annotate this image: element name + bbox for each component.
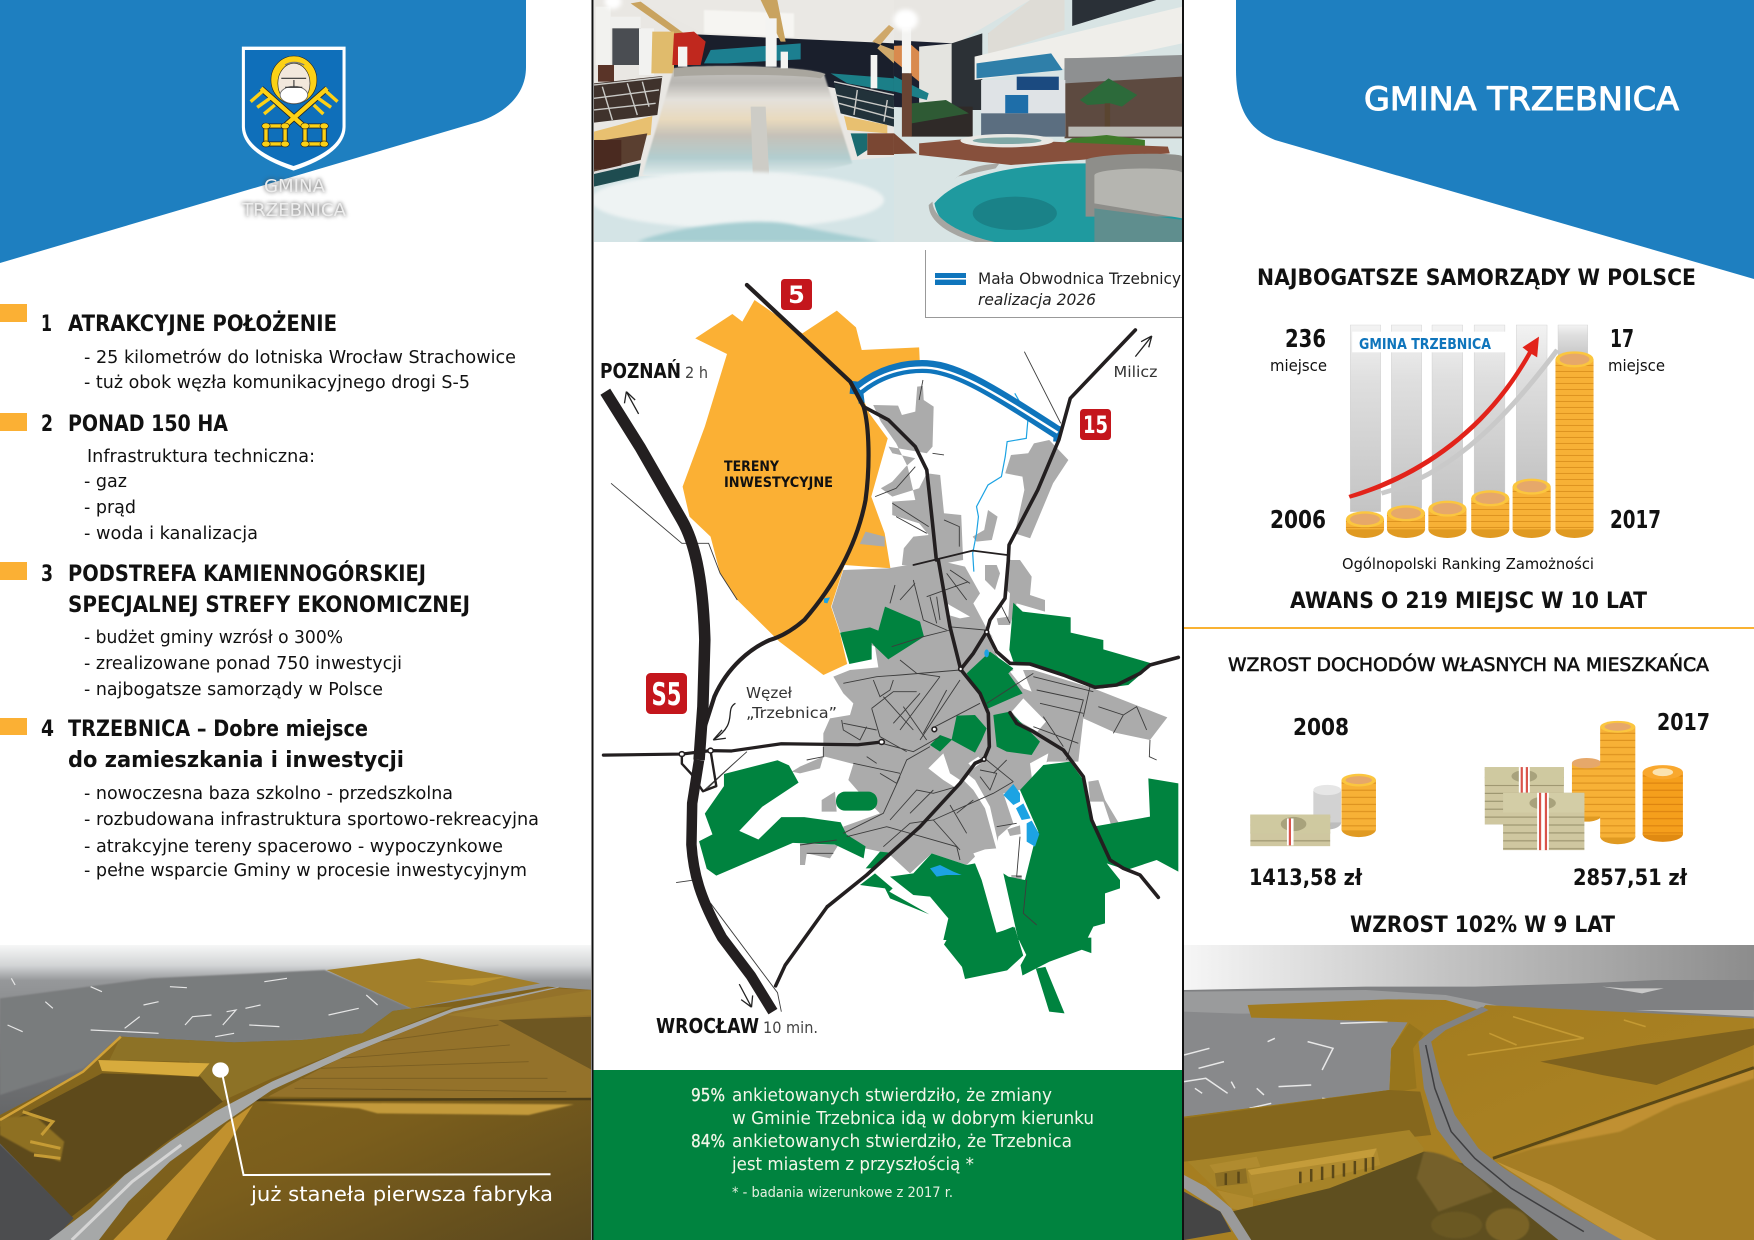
chart: income 2017: 2857,51 zł xyxy=(1573,866,1688,891)
chart: ranking rise: miejsce xyxy=(1608,356,1665,375)
section 2: area xyxy=(0,412,315,544)
panel: survey results: w Gminie Trzebnica idą w dobrym kierunku xyxy=(732,1108,1094,1129)
map labels: Milicz xyxy=(1114,363,1158,381)
heading: income growth: WZROST DOCHODÓW WŁASNYCH NA MIESZKAŃCA xyxy=(1228,652,1709,676)
road badge 5: 5 xyxy=(788,281,805,309)
chart: ranking rise xyxy=(1270,324,1665,573)
icon: Trzebnica coat of arms xyxy=(242,47,346,171)
panel: survey results: 95% xyxy=(691,1085,725,1106)
chart: ranking rise: 236 xyxy=(1285,324,1326,353)
chart: ranking rise: 2017 xyxy=(1610,505,1661,534)
photo: water park fountain xyxy=(590,0,1187,243)
section 4: good place: do zamieszkania i inwestycji xyxy=(68,748,404,773)
map labels: 2 h xyxy=(685,363,708,382)
title: GMINA TRZEBNICA xyxy=(1364,80,1679,118)
chart: income 2008: 1413,58 zł xyxy=(1249,866,1363,891)
photo: aerial view of investment land xyxy=(1184,945,1754,1240)
road badge S5 xyxy=(646,672,688,714)
photo: aerial view with first factory xyxy=(0,945,592,1240)
panel: survey results xyxy=(593,1070,1182,1240)
panel: left blue header xyxy=(0,0,526,263)
section 4: good place: - atrakcyjne tereny spacerowo - wypoczynkowe xyxy=(84,836,503,857)
section 3: economic zone: 3 xyxy=(41,562,53,587)
photo: aerial view with first factory: już staneła pierwsza fabryka xyxy=(250,1182,553,1206)
map labels: WROCŁAW xyxy=(656,1014,759,1038)
divider: right fold line xyxy=(1182,0,1184,1240)
map legend xyxy=(926,250,1182,318)
map: investment area xyxy=(683,300,920,675)
map: streets xyxy=(611,352,1157,1012)
map legend: realizacja 2026 xyxy=(978,290,1096,309)
section 3: economic zone: - zrealizowane ponad 750 inwestycji xyxy=(84,653,402,674)
panel: right blue header xyxy=(1236,0,1754,279)
section 1: location xyxy=(0,304,516,393)
coin stacks xyxy=(1346,351,1594,538)
heading: richest municipalities: NAJBOGATSZE SAMORZĄDY W POLSCE xyxy=(1257,266,1696,291)
map labels xyxy=(600,359,1158,1038)
map legend: Mała Obwodnica Trzebnicy xyxy=(978,269,1181,288)
panel: survey results: 84% xyxy=(691,1131,725,1152)
section 3: economic zone: PODSTREFA KAMIENNOGÓRSKIEJ xyxy=(68,561,426,587)
icon: money 2008 xyxy=(1250,774,1376,846)
section 4: good place: 4 xyxy=(41,717,54,742)
road badge 15 xyxy=(1080,408,1112,440)
section 1: location: - tuż obok węzła komunikacyjnego drogi S-5 xyxy=(84,372,470,393)
chart: ranking rise: 2006 xyxy=(1270,505,1326,534)
section 3: economic zone: - budżet gminy wzrósł o 300% xyxy=(84,627,343,648)
map: direction arrows xyxy=(624,336,1152,1007)
map labels: Węzeł xyxy=(746,684,793,702)
section 2: area: PONAD 150 HA xyxy=(68,412,228,437)
road badge 5 xyxy=(780,278,812,310)
map: north built-up areas xyxy=(873,386,1068,567)
section 4: good place: - rozbudowana infrastruktura sportowo-rekreacyjna xyxy=(84,809,539,830)
section 3: economic zone xyxy=(0,561,470,700)
chart: ranking rise: GMINA TRZEBNICA xyxy=(1359,335,1491,353)
section 2: area: Infrastruktura techniczna: xyxy=(87,446,315,467)
section 2: area: 2 xyxy=(41,412,53,437)
section 1: location: 1 xyxy=(41,312,52,337)
map: ponds and river xyxy=(824,393,1039,877)
section 2: area: - gaz xyxy=(84,471,127,492)
headline: rank gain: AWANS O 219 MIEJSC W 10 LAT xyxy=(1290,589,1647,614)
map labels: TERENY xyxy=(724,459,780,475)
map: bypass road planned xyxy=(850,367,1058,442)
section 3: economic zone: SPECJALNEJ STREFY EKONOMICZNEJ xyxy=(68,593,470,618)
section 2: area: - woda i kanalizacja xyxy=(84,523,258,544)
road badge 15: 15 xyxy=(1083,411,1108,439)
map labels: „Trzebnica” xyxy=(746,704,837,722)
map labels: INWESTYCYJNE xyxy=(724,475,833,491)
map labels: POZNAŃ xyxy=(600,359,681,383)
chart: income 2008: 2008 xyxy=(1293,715,1349,741)
section 4: good place: - pełne wsparcie Gminy w procesie inwestycyjnym xyxy=(84,860,527,881)
panel: survey results: * - badania wizerunkowe z 2017 r. xyxy=(732,1185,953,1201)
road badge S5: S5 xyxy=(652,677,682,713)
logo caption: TRZEBNICA xyxy=(241,200,347,221)
section 1: location: ATRAKCYJNE POŁOŻENIE xyxy=(68,311,337,337)
section 4: good place: TRZEBNICA – Dobre miejsce xyxy=(68,717,368,742)
map: forests xyxy=(699,603,1178,1013)
chart: income 2017: 2017 xyxy=(1657,710,1710,736)
panel: map xyxy=(600,250,1182,1038)
section 4: good place xyxy=(0,717,539,881)
divider: left fold line xyxy=(592,0,594,1240)
section 4: good place: - nowoczesna baza szkolno - przedszkolna xyxy=(84,783,453,804)
chart: income 2017 xyxy=(1485,710,1710,891)
logo caption xyxy=(241,176,347,221)
map labels: 10 min. xyxy=(763,1018,818,1037)
chart: ranking rise: Ogólnopolski Ranking Zamożności xyxy=(1342,555,1594,573)
icon: money 2017 xyxy=(1485,721,1683,850)
chart: ranking rise: miejsce xyxy=(1270,356,1327,375)
chart: income 2008 xyxy=(1249,715,1376,891)
section 2: area: - prąd xyxy=(84,497,136,518)
section 3: economic zone: - najbogatsze samorządy w Polsce xyxy=(84,679,383,700)
panel: survey results: ankietowanych stwierdziło, że Trzebnica xyxy=(732,1131,1072,1152)
section 1: location: - 25 kilometrów do lotniska Wrocław Strachowice xyxy=(84,347,516,368)
chart: ranking rise: 17 xyxy=(1610,324,1634,353)
map: road network xyxy=(603,285,1178,1012)
panel: survey results: ankietowanych stwierdziło, że zmiany xyxy=(732,1085,1052,1106)
map: city built-up area xyxy=(792,532,1167,881)
logo caption: GMINA xyxy=(264,176,326,197)
headline: income growth: WZROST 102% W 9 LAT xyxy=(1350,913,1615,938)
panel: survey results: jest miastem z przyszłością * xyxy=(731,1154,974,1175)
